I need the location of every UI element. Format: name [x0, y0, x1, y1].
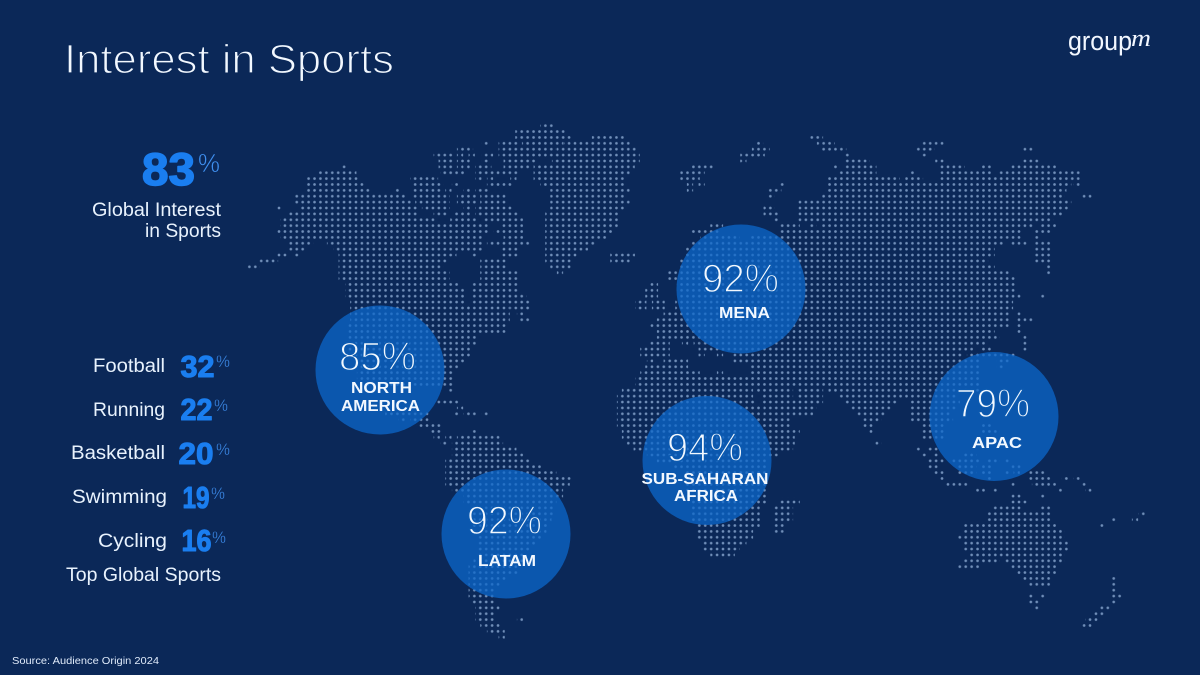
list caption: Top Global Sports: [66, 565, 221, 586]
row: swimming: 19: [182, 480, 210, 515]
stat value 83%: 83: [142, 144, 195, 195]
row: running: Running: [93, 400, 165, 421]
logo: groupm: m: [1131, 26, 1151, 52]
row: basketball: [71, 436, 230, 471]
row: basketball: Basketball: [71, 443, 165, 464]
list: top global sports: [66, 349, 230, 586]
stat value 83%: %: [198, 148, 220, 178]
bubble: north america: AMERICA: [341, 398, 420, 415]
bubble: mena: [676, 224, 806, 354]
bubble: mena: MENA: [719, 305, 770, 322]
row: cycling: %: [212, 528, 226, 547]
title: Interest in Sports: [64, 36, 394, 82]
row: swimming: [72, 480, 225, 515]
row: cycling: [98, 523, 226, 558]
bubble: north america: NORTH: [351, 380, 412, 397]
row: swimming: Swimming: [72, 487, 167, 508]
bubble: sub-saharan africa: [642, 396, 772, 525]
row: running: [93, 392, 228, 427]
bubble: sub-saharan africa: AFRICA: [674, 488, 738, 505]
stat: global interest in sports: [92, 144, 222, 242]
row: football: Football: [93, 356, 165, 377]
dotted world map: [240, 115, 1160, 645]
bubble: apac: [930, 352, 1058, 481]
source note: Source: Audience Origin 2024: [12, 655, 159, 667]
bubble: latam: [442, 470, 570, 598]
row: basketball: 20: [178, 436, 214, 471]
row: running: %: [214, 396, 228, 415]
stat value 83%: [142, 144, 220, 195]
stat caption: in Sports: [145, 221, 221, 242]
logo: groupm: group: [1068, 26, 1132, 56]
row: cycling: 16: [182, 523, 212, 558]
bubble: apac: 79%: [956, 382, 1030, 426]
bubble: latam: LATAM: [478, 553, 536, 570]
row: football: 32: [180, 349, 214, 384]
row: swimming: %: [211, 484, 225, 503]
bubble: mena: 92%: [702, 257, 779, 301]
row: football: %: [216, 352, 230, 371]
bubble: north america: 85%: [339, 335, 416, 379]
bubble: north america: [316, 306, 444, 434]
row: football: [93, 349, 230, 384]
bubble: latam: 92%: [467, 499, 542, 543]
bubble: apac: APAC: [972, 435, 1022, 452]
bubble: sub-saharan africa: SUB-SAHARAN: [642, 471, 768, 488]
bubble: sub-saharan africa: 94%: [667, 426, 743, 470]
row: cycling: Cycling: [98, 531, 167, 552]
row: running: 22: [180, 392, 212, 427]
stat caption: [92, 200, 222, 242]
stat caption: Global Interest: [92, 200, 222, 221]
row: basketball: %: [216, 440, 230, 459]
